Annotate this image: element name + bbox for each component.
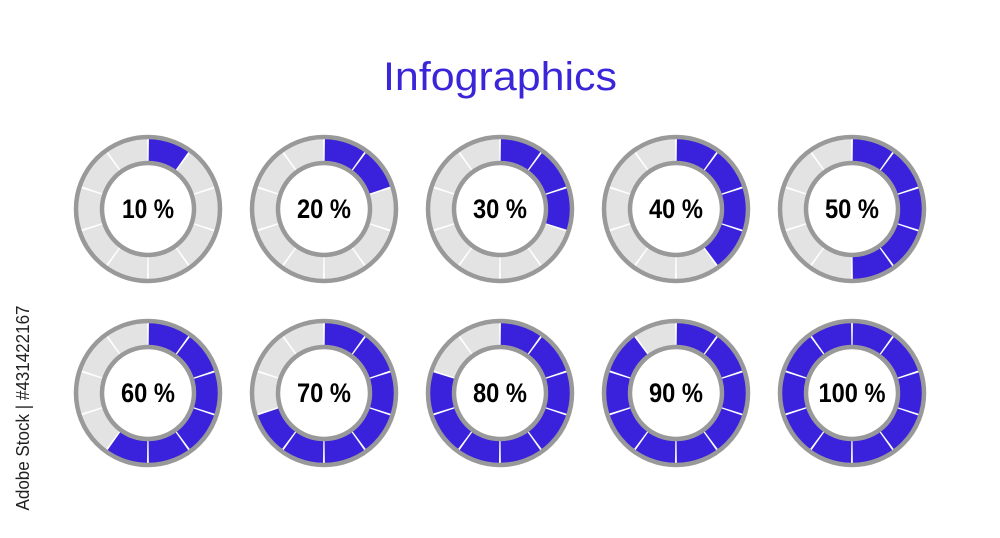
donut 80% [428, 321, 572, 465]
donut 30%: 30 % [473, 194, 527, 224]
donut 50%: 50 % [825, 194, 879, 224]
donut 70%: 70 % [297, 378, 351, 408]
donut 90%: 90 % [649, 378, 703, 408]
watermark: stock id: Adobe Stock | #431422167 [13, 306, 33, 510]
donut 50% [780, 137, 924, 281]
donut 30% [428, 137, 572, 281]
donut 20%: 20 % [297, 194, 351, 224]
donut 100% [780, 321, 924, 465]
donut 70% [252, 321, 396, 465]
donut 100%: 100 % [818, 378, 886, 408]
donut 10%: 10 % [122, 194, 174, 224]
donut 10% [76, 137, 220, 281]
donut 60% [76, 321, 220, 465]
donut 20% [252, 137, 396, 281]
donut 80%: 80 % [473, 378, 527, 408]
donut 40%: 40 % [649, 194, 703, 224]
donut 40% [604, 137, 748, 281]
title: Infographics [383, 55, 617, 99]
donut 60%: 60 % [121, 378, 175, 408]
donut 90% [604, 321, 748, 465]
